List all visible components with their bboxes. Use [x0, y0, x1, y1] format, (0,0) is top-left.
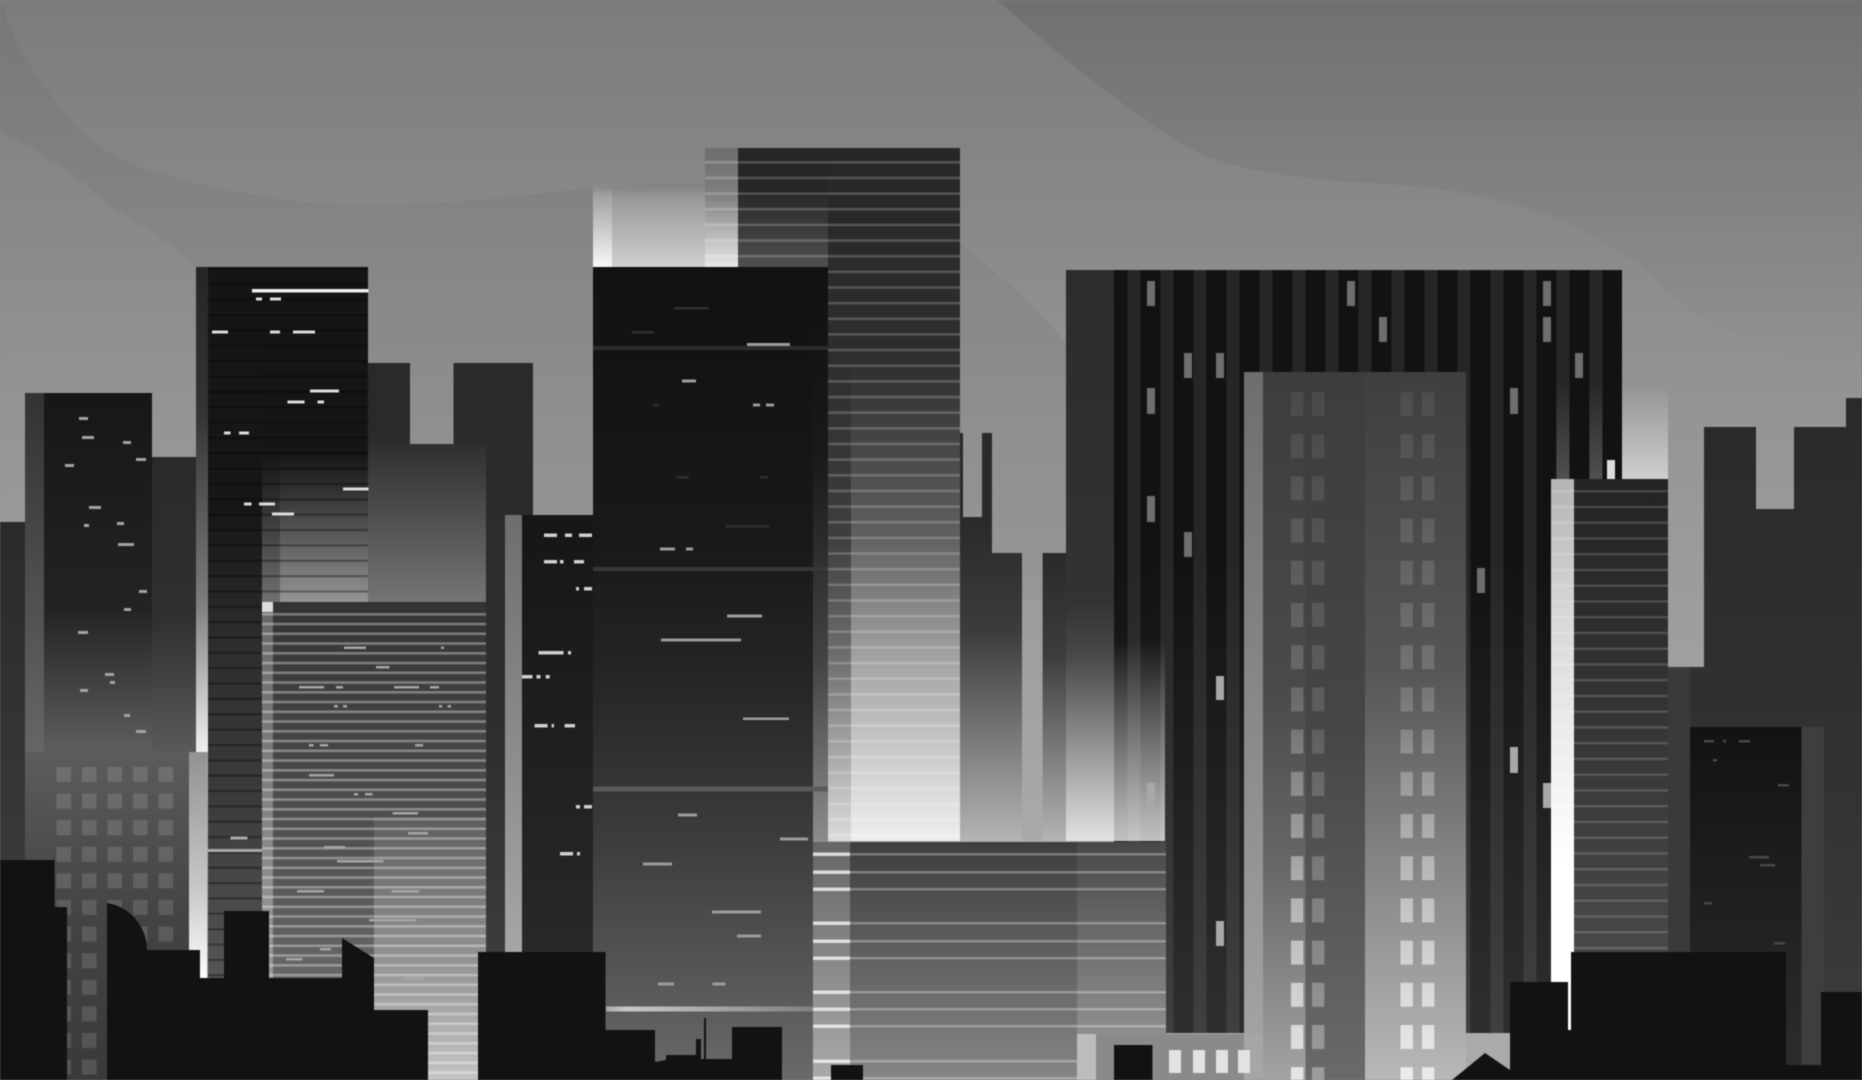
tall tower lower dash: [230, 836, 248, 840]
mid block top marker: [262, 602, 273, 612]
floor building body: [1096, 1034, 1244, 1080]
main tower ledge 3: [593, 786, 828, 792]
castle silhouette building behind the tall tower: [368, 363, 533, 1080]
tall tower upper right panel: [262, 267, 368, 455]
wide building right strip glow 1: [1556, 380, 1569, 479]
glow bright edge: [593, 182, 612, 267]
wide building with vertical stripes: [1066, 270, 1622, 1033]
front window tower: [1244, 372, 1466, 1080]
mid block dashes: [286, 646, 451, 980]
back striped tower: [705, 148, 960, 841]
foreground small rooftop: [831, 1065, 863, 1080]
building: left tower with windows: [25, 393, 196, 1080]
back tower upper dark face: [738, 148, 828, 267]
wide building lower wash: [1114, 550, 1622, 1033]
front tower lit edge: [1244, 372, 1263, 1080]
tall tower roof light bar: [252, 289, 368, 292]
gap spire thin: [960, 433, 963, 841]
gap buildings between towers: [960, 433, 1067, 841]
wide building light fade: [1114, 640, 1165, 841]
front tower right face: [1365, 372, 1466, 1080]
back tower main face: [851, 148, 960, 841]
low block left face: [813, 842, 850, 1080]
narrow building lit edge: [505, 515, 522, 985]
main tower dim dashes: [632, 307, 769, 528]
tall tower lit panel: [280, 455, 368, 602]
tall tower glowing edge: [196, 267, 208, 752]
front tower windows column pair 1b: [1312, 392, 1324, 1080]
narrow building windows: [522, 534, 592, 856]
floor building dark door: [1114, 1045, 1152, 1080]
narrow building with white dashes: [505, 515, 593, 985]
glow above main tower: [593, 182, 705, 267]
left tower edge strip: [25, 393, 44, 752]
mid block lit edge: [262, 602, 273, 1080]
narrow building body: [522, 515, 593, 985]
front tower left face: [1263, 372, 1306, 1080]
floor building with windows: [1077, 1034, 1263, 1080]
low block right face: [1077, 842, 1166, 1080]
back tower light left face: [705, 148, 738, 267]
low striped block in front: [813, 842, 1166, 1080]
far right dark tower: [1668, 667, 1824, 1065]
floor building light edge: [1077, 1034, 1096, 1080]
front tower middle face: [1306, 372, 1365, 1080]
far right tower panel: [1690, 727, 1802, 1065]
mid block base: [273, 602, 486, 1080]
back tower stripes: [705, 161, 960, 841]
wide building dark body: [1114, 270, 1622, 1033]
tall tower floor lines upper: [262, 267, 368, 602]
gap block right: [1043, 553, 1067, 841]
main dark tower: [593, 267, 828, 1080]
wide building left panel: [1066, 270, 1114, 841]
thin tower white edge: [1551, 479, 1574, 1032]
tall tower lit dashes: [212, 298, 368, 516]
tall tower white ledge: [208, 849, 262, 852]
thin tower body: [1574, 479, 1668, 984]
striped mid block in front of the tall tower: [262, 602, 486, 1080]
thin tower roof glow: [1622, 375, 1668, 479]
thin tower white edge highlights: [1551, 490, 1574, 984]
wide building bright slits: [1147, 676, 1551, 946]
main tower ledge 2: [593, 567, 828, 571]
left tower lower body: [25, 752, 189, 1080]
tall tower lower glow: [189, 752, 207, 980]
foreground silhouette right: [1452, 952, 1862, 1080]
low block stripes on left face: [813, 852, 850, 1080]
main tower bright ledge: [606, 1006, 813, 1012]
floor building windows: [1169, 1050, 1250, 1073]
wide building right strip glow 2: [1589, 380, 1602, 479]
gap block left: [960, 517, 1022, 841]
far right tower side: [1668, 667, 1690, 987]
left tower lit dashes: [65, 417, 147, 733]
wide building vertical strips: [1127, 270, 1602, 1033]
tall tower with horizontal lines: [189, 267, 368, 1000]
tall tower dark column: [208, 267, 262, 1000]
mid block bright reflection: [374, 817, 486, 1080]
front tower windows column pair 1: [1291, 392, 1303, 1080]
far left background building: [0, 522, 30, 1080]
main tower lit right edge: [813, 267, 828, 847]
far right tower dim dashes: [1704, 740, 1789, 944]
far right tower strip: [1802, 727, 1824, 1065]
wide building lit slits: [1147, 281, 1583, 593]
thin tower stripes: [1574, 490, 1668, 984]
glow body: [612, 182, 705, 267]
back tower left face: [828, 148, 851, 841]
foreground silhouette left: [0, 860, 428, 1080]
main tower ledge 1: [593, 346, 828, 350]
tall tower lit panel (inner strip): [262, 455, 280, 602]
left tower glass panel: [44, 393, 152, 752]
sky wave: dark cloud at upper right: [997, 0, 1862, 377]
far right background silhouette: [1668, 398, 1862, 1080]
low block main face: [850, 842, 1077, 1080]
main tower bright dashes: [643, 343, 808, 986]
left tower side wing: [152, 457, 196, 752]
floor building lit edge: [1244, 1034, 1263, 1080]
mid block stripes: [262, 613, 486, 1080]
gap spire block: [982, 433, 992, 553]
translucent lit block beside the tall tower: [368, 444, 486, 602]
low block stripes on main face: [850, 853, 1166, 1080]
foreground silhouette center: [478, 952, 782, 1080]
back tower lit patch: [738, 195, 828, 267]
right thin tower: [1551, 375, 1668, 1032]
sky wave: band behind the left towers: [0, 0, 1066, 600]
front tower windows column pair 2: [1400, 392, 1434, 1080]
left tower window grid: [56, 767, 173, 1080]
main tower body: [593, 267, 813, 1080]
tall tower floor lines: [208, 267, 262, 1000]
thin tower roof window: [1607, 460, 1615, 479]
